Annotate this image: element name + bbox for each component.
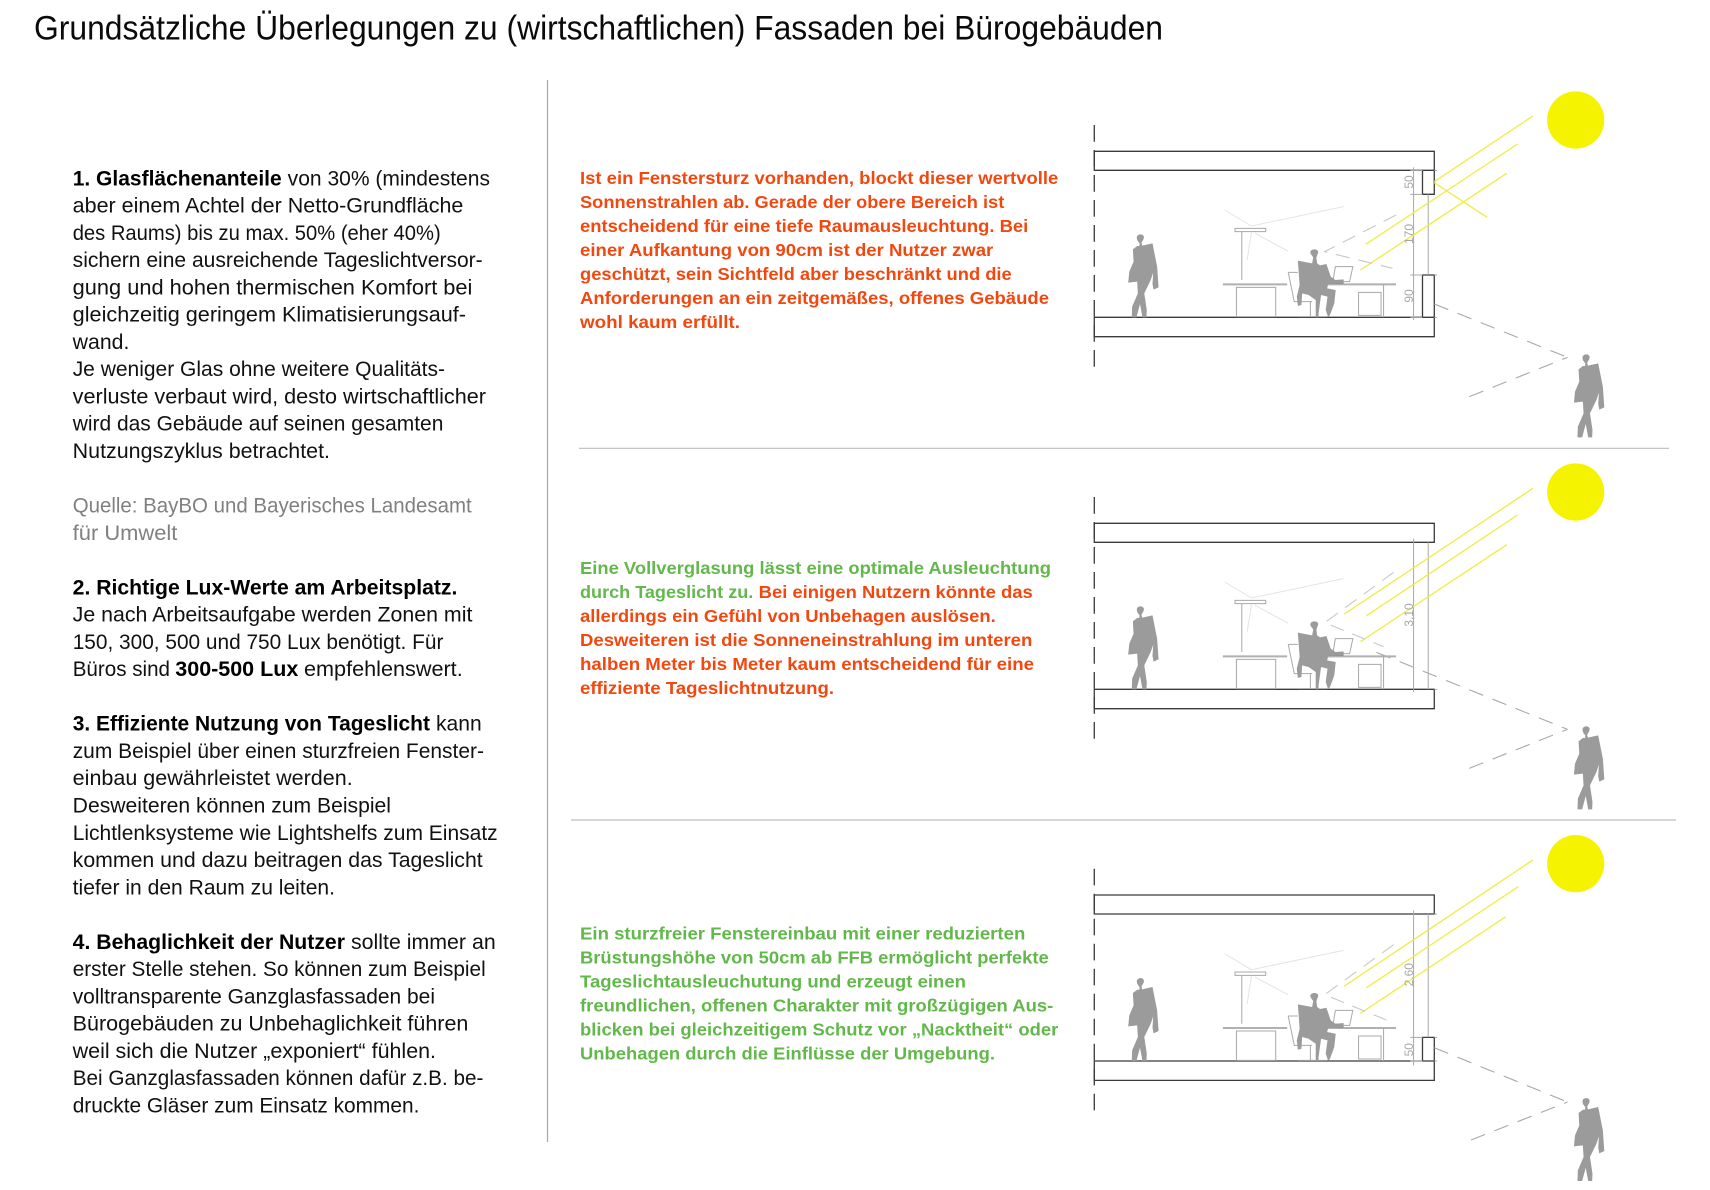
callout text: sturzfreier Fenstereinbau (green): Ein sturzfreier Fenstereinbau mit einer reduzierten xyxy=(580,924,1025,944)
sun rays xyxy=(1344,860,1533,1013)
text block: 3. Effiziente Nutzung von Tageslicht: kann xyxy=(436,713,482,736)
sight lines xyxy=(1325,215,1396,268)
text block: 2. Richtige Lux-Werte: Büros sind xyxy=(73,658,170,681)
dimension labels: 2,60 xyxy=(1402,963,1416,986)
callout text: Fenstersturz (red): Anforderungen an ein zeitgemäßes, offenes Gebäude xyxy=(580,288,1049,308)
callout text: Fenstersturz (red): einer Aufkantung von 90cm ist der Nutzer zwar xyxy=(580,240,993,260)
callout text: sturzfreier Fenstereinbau (green): Tageslichtausleuchutung und erzeugt einen xyxy=(580,972,966,992)
glass line, dimension line and ticks xyxy=(1410,167,1437,320)
dimension labels: 170 xyxy=(1402,224,1416,244)
text block: 2. Richtige Lux-Werte: 150, 300, 500 und 750 Lux benötigt. Für xyxy=(73,631,443,654)
callout text: Vollverglasung (green and red): effiziente Tageslichtnutzung. xyxy=(580,678,834,698)
panel: section diagram with lintel and 90cm parapet xyxy=(1094,91,1604,437)
dimension labels: 90 xyxy=(1402,289,1416,303)
text block: 1. Glasflächenanteile: gleichzeitig geringem Klimatisierungsauf- xyxy=(73,304,466,327)
text block: 4. Behaglichkeit der Nutzer: 4. Behaglichkeit der Nutzer xyxy=(73,931,345,954)
callout text: sturzfreier Fenstereinbau (green): Brüstungshöhe von 50cm ab FFB ermöglicht perfekte xyxy=(580,948,1049,968)
callout text: Vollverglasung (green and red): durch Tageslicht zu. xyxy=(580,582,753,602)
floor lamp xyxy=(1225,950,1344,1024)
vertical divider xyxy=(546,80,548,1142)
text block: 1. Glasflächenanteile: aber einem Achtel der Netto-Grundfläche xyxy=(73,195,463,218)
outside sight lines xyxy=(1376,652,1567,768)
title: Grundsätzliche Überlegungen zu (wirtschaftlichen) Fassaden bei Bürogebäuden xyxy=(34,10,1163,48)
section line xyxy=(1093,497,1095,742)
window parapet xyxy=(1422,1037,1434,1061)
floor lamp xyxy=(1225,579,1344,652)
text block: 3. Effiziente Nutzung von Tageslicht: Lichtlenksysteme wie Lightshelfs zum Einsatz xyxy=(73,822,498,845)
text block: 3. Effiziente Nutzung von Tageslicht: Desweiteren können zum Beispiel xyxy=(73,794,391,818)
standing person outside xyxy=(1574,354,1604,437)
callout text: Fenstersturz (red): entscheidend für eine tiefe Raumausleuchtung. Bei xyxy=(580,216,1028,236)
text block: 1. Glasflächenanteile: Nutzungszyklus betrachtet. xyxy=(73,440,330,463)
text block: 3. Effiziente Nutzung von Tageslicht: zum Beispiel über einen sturzfreien Fenster- xyxy=(73,740,484,763)
sight lines xyxy=(1325,572,1394,647)
sun rays xyxy=(1344,488,1533,642)
text block: 1. Glasflächenanteile: wird das Gebäude auf seinen gesamten xyxy=(72,413,443,436)
standing person inside xyxy=(1128,606,1159,689)
horizontal divider lower xyxy=(571,819,1676,821)
text block: 4. Behaglichkeit der Nutzer: weil sich die Nutzer „exponiert“ fühlen. xyxy=(72,1040,436,1063)
text block: 1. Glasflächenanteile: verluste verbaut wird, desto wirtschaftlicher xyxy=(73,386,486,408)
text block: 4. Behaglichkeit der Nutzer: Bei Ganzglasfassaden können dafür z.B. be- xyxy=(73,1067,483,1090)
text block: 1. Glasflächenanteile: von 30% (mindestens xyxy=(288,167,490,190)
panel: section diagram with full glazing xyxy=(1094,463,1604,809)
text block: 2. Richtige Lux-Werte xyxy=(73,576,473,681)
text block: 2. Richtige Lux-Werte: empfehlenswert. xyxy=(304,658,463,681)
icon: sun xyxy=(1547,91,1604,149)
text block: 1. Glasflächenanteile: Je weniger Glas ohne weitere Qualitäts- xyxy=(73,358,445,381)
callout text: sturzfreier Fenstereinbau (green): freundlichen, offenen Charakter mit großzügigen Aus- xyxy=(580,996,1053,1016)
source note: für Umwelt xyxy=(73,522,178,545)
dimension labels: 50 xyxy=(1402,1043,1416,1056)
glass line, dimension line and ticks xyxy=(1410,910,1437,1065)
text block: 4. Behaglichkeit der Nutzer: volltransparente Ganzglasfassaden bei xyxy=(73,985,435,1008)
standing person outside xyxy=(1574,1098,1604,1181)
text block: 3. Effiziente Nutzung von Tageslicht: tiefer in den Raum zu leiten. xyxy=(73,876,335,899)
text block: 2. Richtige Lux-Werte: 2. Richtige Lux-Werte am Arbeitsplatz. xyxy=(73,576,457,599)
building slabs xyxy=(1094,523,1434,709)
callout text: Fenstersturz (red): geschützt, sein Sichtfeld aber beschränkt und die xyxy=(580,264,1012,284)
text block: 1. Glasflächenanteile: des Raums) bis zu max. 50% (eher 40%) xyxy=(73,222,441,245)
callout text: Vollverglasung (green and red): Desweiteren ist die Sonneneinstrahlung im unteren xyxy=(580,630,1032,650)
text block: 3. Effiziente Nutzung von Tageslicht xyxy=(73,713,498,899)
callout text: Fenstersturz (red): Sonnenstrahlen ab. Gerade der obere Bereich ist xyxy=(580,192,1004,212)
outside sight lines xyxy=(1434,1048,1567,1140)
outside sight lines xyxy=(1434,304,1567,397)
text block: 4. Behaglichkeit der Nutzer: druckte Gläser zum Einsatz kommen. xyxy=(73,1094,419,1118)
desk with seated user xyxy=(1223,621,1396,689)
text block: 1. Glasflächenanteile: wand. xyxy=(72,331,129,354)
text block: 4. Behaglichkeit der Nutzer: sollte immer an xyxy=(351,931,496,954)
horizontal divider upper xyxy=(579,447,1669,449)
callout text: Fenstersturz (red) xyxy=(579,168,1059,332)
icon: sun xyxy=(1547,835,1604,892)
text block: 2. Richtige Lux-Werte: Je nach Arbeitsaufgabe werden Zonen mit xyxy=(73,604,473,627)
callout text: Vollverglasung (green and red): halben Meter bis Meter kaum entscheidend für eine xyxy=(580,654,1034,674)
glass line and dimension line xyxy=(1414,539,1437,692)
dimension labels xyxy=(1402,963,1416,1056)
text block: 3. Effiziente Nutzung von Tageslicht: einbau gewährleistet werden. xyxy=(73,767,353,790)
callout text: Vollverglasung (green and red): Eine Vollverglasung lässt eine optimale Ausleuchtung xyxy=(580,558,1051,578)
dimension labels: 50 xyxy=(1402,175,1416,189)
callout text: Fenstersturz (red): wohl kaum erfüllt. xyxy=(579,312,740,332)
callout text: Vollverglasung (green and red): allerdings ein Gefühl von Unbehagen auslösen. xyxy=(580,606,996,626)
building slabs xyxy=(1094,151,1434,337)
standing person outside xyxy=(1574,726,1604,809)
standing person inside xyxy=(1128,978,1159,1061)
source note: Quelle: BayBO und Bayerisches Landesamt xyxy=(73,494,472,518)
section line xyxy=(1093,869,1095,1114)
building slabs xyxy=(1094,895,1434,1080)
section line xyxy=(1093,125,1095,370)
icon: sun xyxy=(1547,463,1604,521)
sight lines xyxy=(1325,945,1394,1020)
text block: 1. Glasflächenanteile: 1. Glasflächenanteile xyxy=(73,167,282,190)
sun rays xyxy=(1360,116,1533,270)
standing person inside xyxy=(1128,234,1159,317)
text block: 4. Behaglichkeit der Nutzer: Bürogebäuden zu Unbehaglichkeit führen xyxy=(73,1013,468,1036)
floor lamp xyxy=(1225,207,1344,280)
text block: 3. Effiziente Nutzung von Tageslicht: 3. Effiziente Nutzung von Tageslicht xyxy=(73,713,430,736)
callout text: sturzfreier Fenstereinbau (green) xyxy=(580,924,1058,1064)
desk with seated user xyxy=(1223,993,1396,1061)
text block: 1. Glasflächenanteile xyxy=(72,167,490,463)
text block: 3. Effiziente Nutzung von Tageslicht: kommen und dazu beitragen das Tageslicht xyxy=(73,849,483,872)
dimension label: 3,10 xyxy=(1402,603,1416,627)
text block: 1. Glasflächenanteile: gung und hohen thermischen Komfort bei xyxy=(73,276,472,299)
dimension labels xyxy=(1402,175,1416,303)
callout text: sturzfreier Fenstereinbau (green): blicken bei gleichzeitigem Schutz vor „Nacktheit“ oder xyxy=(580,1020,1058,1040)
text block: 4. Behaglichkeit der Nutzer: erster Stelle stehen. So können zum Beispiel xyxy=(73,958,486,981)
callout text: sturzfreier Fenstereinbau (green): Unbehagen durch die Einflüsse der Umgebung. xyxy=(580,1044,995,1064)
callout text: Vollverglasung (green and red): Bei einigen Nutzern könnte das xyxy=(759,582,1033,602)
callout text: Vollverglasung (green and red) xyxy=(580,558,1051,698)
text block: 1. Glasflächenanteile: sichern eine ausreichende Tageslichtversor- xyxy=(73,249,483,272)
text block: 4. Behaglichkeit der Nutzer xyxy=(72,931,496,1118)
window lintel and parapet xyxy=(1422,170,1434,317)
callout text: Fenstersturz (red): Ist ein Fenstersturz vorhanden, blockt dieser wertvolle xyxy=(580,168,1059,188)
source note xyxy=(73,494,472,545)
panel: section diagram without lintel, 50cm parapet xyxy=(1094,835,1604,1181)
desk with seated user xyxy=(1223,249,1396,317)
text block: 2. Richtige Lux-Werte: 300-500 Lux xyxy=(175,658,299,681)
